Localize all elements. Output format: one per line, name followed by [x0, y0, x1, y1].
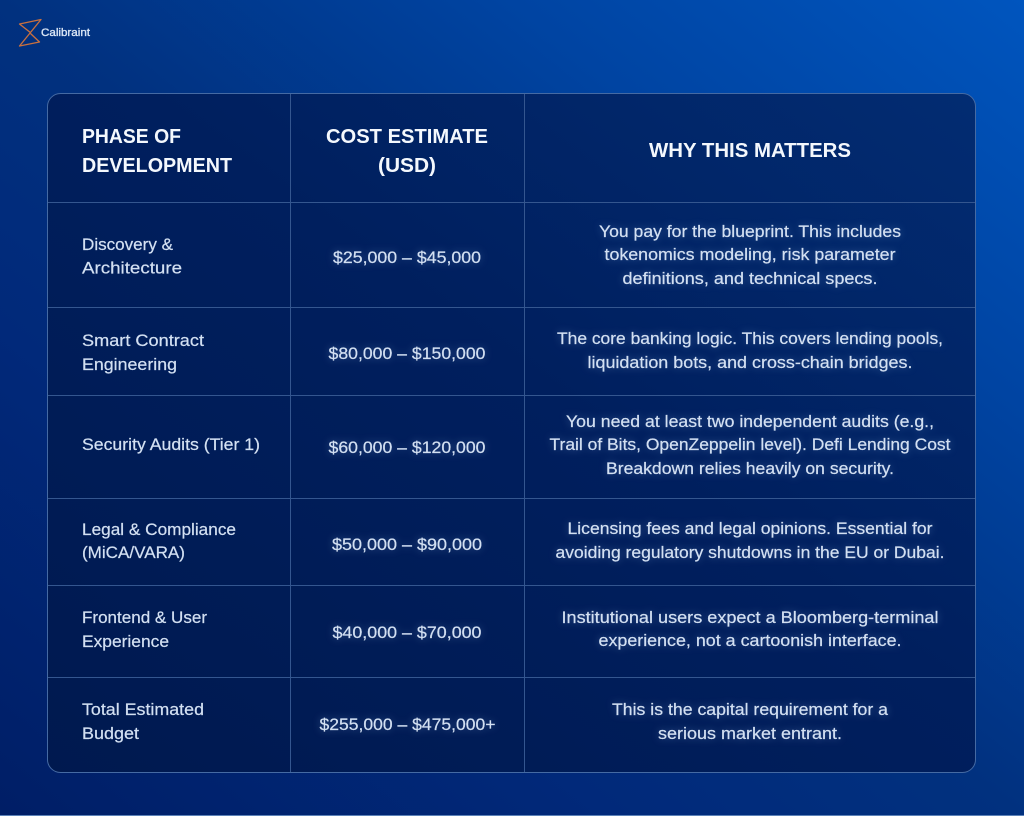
rationale: This is the capital requirement for a [612, 700, 889, 719]
rationale [562, 608, 938, 650]
phase name: (MiCA/VARA) [82, 543, 185, 562]
phase name: Security Audits (Tier 1) [82, 435, 260, 454]
cost range: $50,000 – $90,000 [332, 535, 482, 554]
phase name [82, 331, 204, 374]
rationale: Trail of Bits, OpenZeppelin level). Defi Lending Cost [550, 435, 951, 454]
cost range: $80,000 – $150,000 [328, 344, 486, 363]
rationale: tokenomics modeling, risk parameter [604, 245, 896, 264]
phase name [82, 235, 182, 278]
heading: cost estimate [326, 125, 488, 177]
row: legal and compliance [82, 519, 944, 562]
rationale: You need at least two independent audits (e.g., [566, 412, 934, 431]
row: frontend and user experience [82, 608, 938, 651]
phase name: Architecture [82, 258, 182, 278]
rationale: experience, not a cartoonish interface. [598, 631, 902, 650]
phase name: Legal & Compliance [82, 520, 236, 539]
rationale [612, 700, 889, 743]
cost range: $60,000 – $120,000 [328, 438, 486, 457]
rationale [557, 329, 943, 372]
phase name: Total Estimated [82, 700, 204, 719]
rationale: Institutional users expect a Bloomberg-terminal [562, 608, 938, 627]
phase name: Engineering [82, 355, 177, 374]
phase name: Experience [82, 632, 169, 651]
row: total estimated budget [82, 700, 889, 743]
rationale: serious market entrant. [658, 724, 842, 743]
brand name: Calibraint [41, 27, 90, 39]
rationale [599, 222, 901, 288]
heading: why this matters: WHY THIS MATTERS [649, 139, 851, 162]
rationale [550, 412, 951, 478]
heading: phase of development: DEVELOPMENT [82, 154, 232, 177]
rationale: The core banking logic. This covers lending pools, [557, 329, 943, 348]
phase name: Discovery & [82, 235, 173, 254]
icon: orange Z mark [20, 20, 41, 46]
row: security audits [82, 412, 951, 478]
phase name: Budget [82, 724, 139, 743]
rationale: Breakdown relies heavily on security. [606, 459, 894, 478]
header row [82, 125, 851, 177]
rationale: Licensing fees and legal opinions. Essential for [568, 519, 933, 538]
rationale: You pay for the blueprint. This includes [599, 222, 901, 241]
heading: phase of development [82, 125, 232, 177]
row: smart contract engineering [82, 329, 943, 374]
cost range: $40,000 – $70,000 [332, 623, 482, 642]
logo: Calibraint [20, 20, 90, 46]
cost range: $25,000 – $45,000 [333, 248, 481, 267]
phase name [82, 520, 236, 562]
phase name: Frontend & User [82, 608, 207, 627]
phase name: Smart Contract [82, 331, 204, 350]
table panel [48, 94, 976, 772]
rationale [556, 519, 944, 562]
heading: cost estimate: (USD) [378, 154, 436, 177]
row: discovery and architecture [82, 222, 901, 288]
heading: phase of development: PHASE OF [82, 125, 181, 148]
rationale: liquidation bots, and cross-chain bridges. [588, 353, 912, 372]
heading: cost estimate: COST ESTIMATE [326, 125, 488, 148]
rationale: definitions, and technical specs. [622, 269, 878, 288]
rationale: avoiding regulatory shutdowns in the EU or Dubai. [556, 543, 944, 562]
phase name [82, 608, 207, 651]
cost range: $255,000 – $475,000+ [320, 715, 496, 734]
table: cost breakdown [48, 94, 976, 772]
phase name [82, 700, 204, 743]
